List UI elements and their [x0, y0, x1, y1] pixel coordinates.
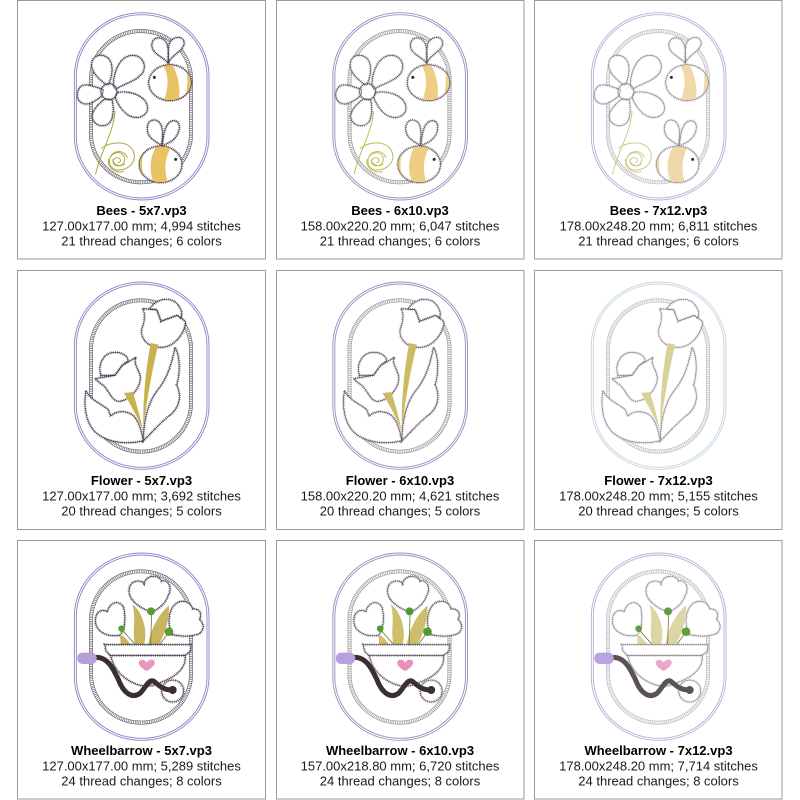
caption: Wheelbarrow 7x12: [559, 743, 758, 788]
icon: purple grip: [336, 653, 355, 664]
artwork: Wheelbarrow 5x7: [74, 553, 209, 740]
panel: Flower 5x7: [18, 270, 266, 530]
artwork: Bees 5x7: [74, 13, 209, 200]
icon: tulip blooms: [354, 576, 462, 636]
icon: leaves and buds: [118, 604, 173, 644]
artwork: Flower 6x10: [333, 282, 467, 469]
icon: outer hoop: [591, 282, 726, 469]
caption: Flower 7x12: 178.00x248.20 mm; 5,155 stitches: [559, 488, 758, 504]
caption: Wheelbarrow 6x10: 157.00x218.80 mm; 6,720 stitches: [301, 758, 500, 774]
icon: wheel: [679, 680, 701, 702]
icon: upper tulip: [400, 299, 444, 347]
caption: Wheelbarrow 5x7: Wheelbarrow - 5x7.vp3: [71, 743, 212, 758]
icon: leaves: [85, 347, 179, 443]
icon: heart: [397, 660, 413, 671]
caption: Bees 5x7: [42, 203, 241, 248]
artwork: Wheelbarrow 7x12: [591, 553, 726, 740]
caption: Bees 6x10: 21 thread changes; 6 colors: [320, 234, 481, 248]
icon: handle: [614, 657, 694, 696]
caption: Bees 5x7: 127.00x177.00 mm; 4,994 stitches: [42, 218, 241, 234]
caption: Bees 7x12: [560, 203, 758, 248]
icon: wheel: [420, 680, 442, 702]
icon: daisy: [594, 55, 664, 126]
icon: outer hoop: [591, 553, 726, 740]
panel: Flower 7x12: [534, 270, 782, 530]
icon: tulip stems: [383, 343, 417, 431]
icon: outer hoop: [74, 553, 209, 740]
caption: Flower 6x10: Flower - 6x10.vp3: [346, 473, 454, 488]
caption: Wheelbarrow 7x12: 178.00x248.20 mm; 7,714 stitches: [559, 758, 758, 774]
caption: Flower 7x12: Flower - 7x12.vp3: [604, 473, 713, 488]
icon: inner stitched frame: [348, 29, 451, 184]
caption: Flower 5x7: 127.00x177.00 mm; 3,692 stitches: [42, 488, 241, 504]
icon: tulip blooms: [612, 576, 720, 636]
artwork: Bees 6x10: [333, 13, 467, 200]
caption: Wheelbarrow 5x7: 24 thread changes; 8 colors: [61, 774, 222, 788]
icon: upper bee: [664, 37, 714, 103]
icon: outer hoop: [333, 282, 467, 469]
icon: wheel: [162, 680, 184, 702]
artwork: Wheelbarrow 6x10: [333, 553, 467, 740]
icon: upper bee: [147, 37, 197, 103]
panel: Wheelbarrow 5x7: [18, 540, 266, 799]
icon: upper bee: [405, 37, 455, 103]
artwork: Bees 7x12: [591, 13, 726, 200]
icon: inner stitched frame: [89, 570, 193, 724]
icon: barrow bowl: [105, 645, 191, 686]
caption: Flower 7x12: 20 thread changes; 5 colors: [578, 504, 739, 518]
panel: Flower 6x10: [276, 270, 524, 530]
icon: inner stitched frame: [89, 29, 193, 184]
caption: Wheelbarrow 7x12: 24 thread changes; 8 colors: [578, 774, 739, 788]
icon: outer hoop: [591, 13, 726, 200]
icon: purple grip: [77, 653, 97, 664]
icon: left tulip: [95, 352, 140, 401]
icon: barrow bowl: [622, 645, 708, 686]
icon: left tulip: [354, 352, 399, 401]
icon: lower bee: [395, 120, 440, 183]
icon: tulip blooms: [95, 576, 203, 636]
icon: daisy: [77, 55, 147, 126]
panel: Bees 5x7: [18, 0, 266, 259]
icon: inner stitched frame: [348, 299, 451, 453]
caption: Bees 7x12: Bees - 7x12.vp3: [610, 203, 707, 218]
caption: Flower 6x10: 20 thread changes; 5 colors: [320, 504, 481, 518]
artwork: Flower 7x12: [591, 282, 726, 469]
icon: inner stitched frame: [606, 29, 710, 184]
icon: leaves and buds: [377, 604, 432, 644]
icon: left tulip: [612, 352, 657, 401]
caption: Bees 6x10: 158.00x220.20 mm; 6,047 stitches: [301, 218, 500, 234]
caption: Flower 5x7: 20 thread changes; 5 colors: [61, 504, 222, 518]
icon: inner stitched frame: [89, 299, 193, 453]
icon: leaves: [602, 347, 696, 443]
icon: flower stem and spiral: [613, 112, 651, 174]
caption: Flower 5x7: Flower - 5x7.vp3: [91, 473, 192, 488]
artwork: Flower 5x7: [74, 282, 209, 469]
icon: flower stem and spiral: [354, 112, 393, 174]
panel: Wheelbarrow 6x10: [276, 540, 524, 799]
panel: Bees 7x12: [534, 0, 782, 259]
icon: upper tulip: [659, 299, 702, 347]
panel: Bees 6x10: [276, 0, 524, 259]
caption: Bees 5x7: Bees - 5x7.vp3: [96, 203, 187, 218]
icon: inner stitched frame: [606, 299, 710, 453]
caption: Flower 5x7: [42, 473, 241, 518]
icon: outer hoop: [74, 13, 209, 200]
caption: Wheelbarrow 5x7: [42, 743, 241, 788]
caption: Flower 6x10: 158.00x220.20 mm; 4,621 stitches: [301, 488, 500, 504]
icon: leaves: [343, 347, 438, 443]
icon: purple grip: [594, 653, 614, 664]
icon: handle: [355, 657, 435, 696]
icon: handle: [97, 657, 177, 696]
icon: lower bee: [654, 120, 699, 183]
icon: tulip stems: [124, 343, 158, 431]
icon: outer hoop: [74, 282, 209, 469]
caption: Wheelbarrow 6x10: Wheelbarrow - 6x10.vp3: [326, 743, 474, 758]
icon: heart: [656, 660, 672, 671]
caption: Flower 6x10: [301, 473, 500, 518]
icon: upper tulip: [142, 299, 185, 347]
caption: Bees 7x12: 178.00x248.20 mm; 6,811 stitches: [560, 218, 758, 234]
icon: outer hoop: [333, 553, 467, 740]
icon: inner stitched frame: [606, 570, 710, 724]
icon: flower stem and spiral: [96, 112, 134, 174]
icon: leaves and buds: [635, 604, 690, 644]
caption: Bees 6x10: Bees - 6x10.vp3: [351, 203, 449, 218]
caption: Bees 6x10: [301, 203, 500, 248]
caption: Wheelbarrow 5x7: 127.00x177.00 mm; 5,289 stitches: [42, 758, 241, 774]
panel: Wheelbarrow 7x12: [534, 540, 782, 799]
caption: Bees 7x12: 21 thread changes; 6 colors: [578, 234, 739, 248]
icon: lower bee: [137, 120, 182, 183]
caption: Wheelbarrow 7x12: Wheelbarrow - 7x12.vp3: [584, 743, 733, 758]
caption: Wheelbarrow 6x10: 24 thread changes; 8 colors: [320, 774, 481, 788]
caption: Flower 7x12: [559, 473, 758, 518]
caption: Wheelbarrow 6x10: [301, 743, 500, 788]
icon: inner stitched frame: [348, 570, 451, 724]
icon: daisy: [336, 55, 406, 126]
caption: Bees 5x7: 21 thread changes; 6 colors: [61, 234, 222, 248]
icon: heart: [139, 660, 155, 671]
icon: barrow bowl: [363, 645, 449, 686]
icon: outer hoop: [333, 13, 467, 200]
icon: tulip stems: [641, 343, 675, 431]
